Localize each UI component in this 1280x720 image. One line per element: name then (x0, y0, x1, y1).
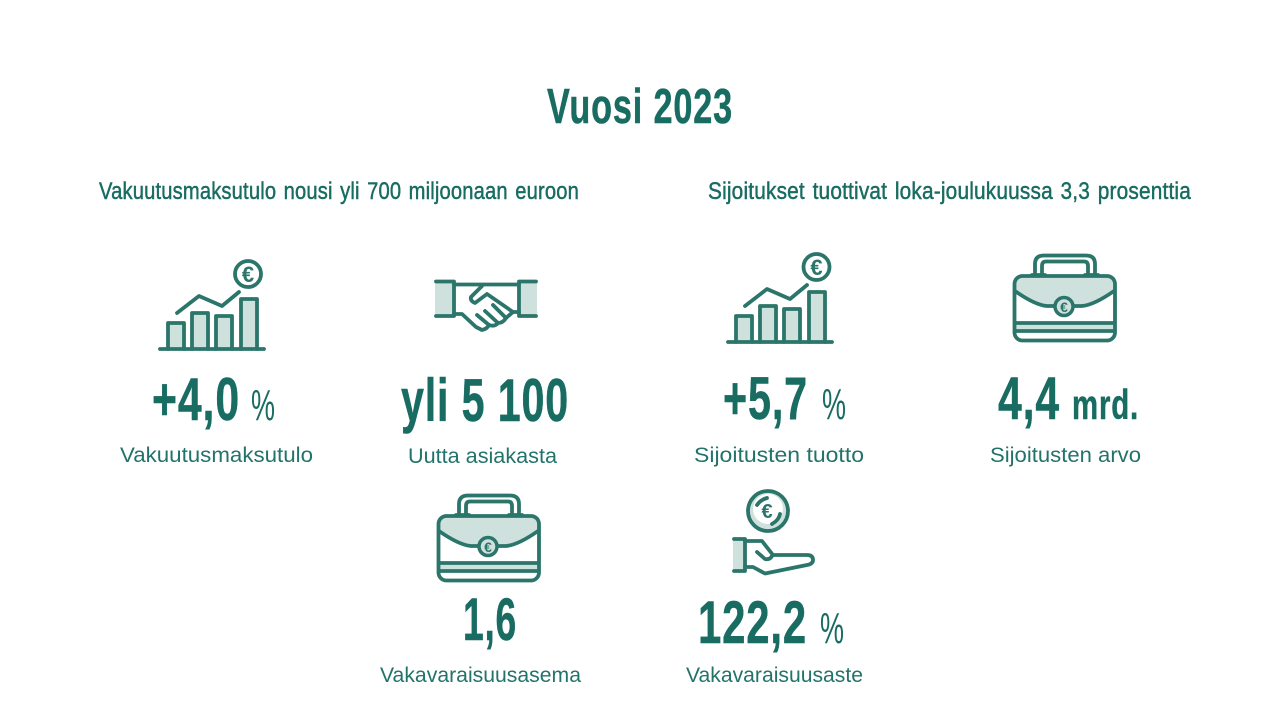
icon: briefcase (1014, 256, 1115, 340)
value: 4,4 mrd.: mrd. (1072, 381, 1139, 428)
heading: investment returns: Sijoitukset tuottivat loka-joulukuussa 3,3 prosenttia (708, 178, 1191, 205)
panel: solvency ratio (686, 491, 863, 687)
value: 122,2 %: % (820, 604, 844, 653)
icon: bar chart with euro coin (160, 261, 264, 349)
panel: premium income (120, 261, 313, 467)
label: Uutta asiakasta: Uutta asiakasta (408, 445, 557, 468)
title: Vuosi 2023 (547, 80, 733, 134)
value: +5,7 %: +5,7 (723, 365, 808, 432)
value: 1,6: 1,6 (463, 586, 517, 653)
label: Vakavaraisuusaste: Vakavaraisuusaste (686, 664, 863, 687)
label: Vakavaraisuusasema: Vakavaraisuusasema (380, 664, 581, 687)
label: Vakuutusmaksutulo: Vakuutusmaksutulo (120, 444, 313, 467)
icon: briefcase (438, 496, 539, 580)
value: 122,2 %: 122,2 (698, 589, 807, 656)
panel: investment value (990, 256, 1141, 467)
value: +4,0 %: % (251, 381, 275, 430)
value: +4,0 %: +4,0 (152, 366, 240, 433)
icon: bar chart with euro coin (728, 254, 832, 342)
label: Sijoitusten tuotto: Sijoitusten tuotto (694, 444, 864, 467)
value: 4,4 mrd. (998, 365, 1139, 432)
panel: investment return (694, 254, 864, 467)
panel: solvency position (380, 496, 581, 687)
heading: insurance premium income: Vakuutusmaksutulo nousi yli 700 miljoonaan euroon (99, 178, 579, 205)
icon: coin over open hand (733, 491, 813, 574)
icon: bar chart with euro coin: € (810, 255, 823, 280)
value: 4,4 mrd.: 4,4 (998, 365, 1060, 432)
icon: bar chart with euro coin: € (242, 262, 254, 287)
label: Sijoitusten arvo: Sijoitusten arvo (990, 444, 1141, 467)
value: +5,7 %: % (822, 380, 846, 429)
panel: new customers (401, 282, 569, 468)
icon: coin over open hand: € (761, 501, 773, 523)
icon: handshake (435, 282, 537, 330)
icon: briefcase: € (484, 539, 492, 555)
icon: briefcase: € (1060, 299, 1068, 315)
value: yli 5 100: yli 5 100 (401, 367, 569, 434)
